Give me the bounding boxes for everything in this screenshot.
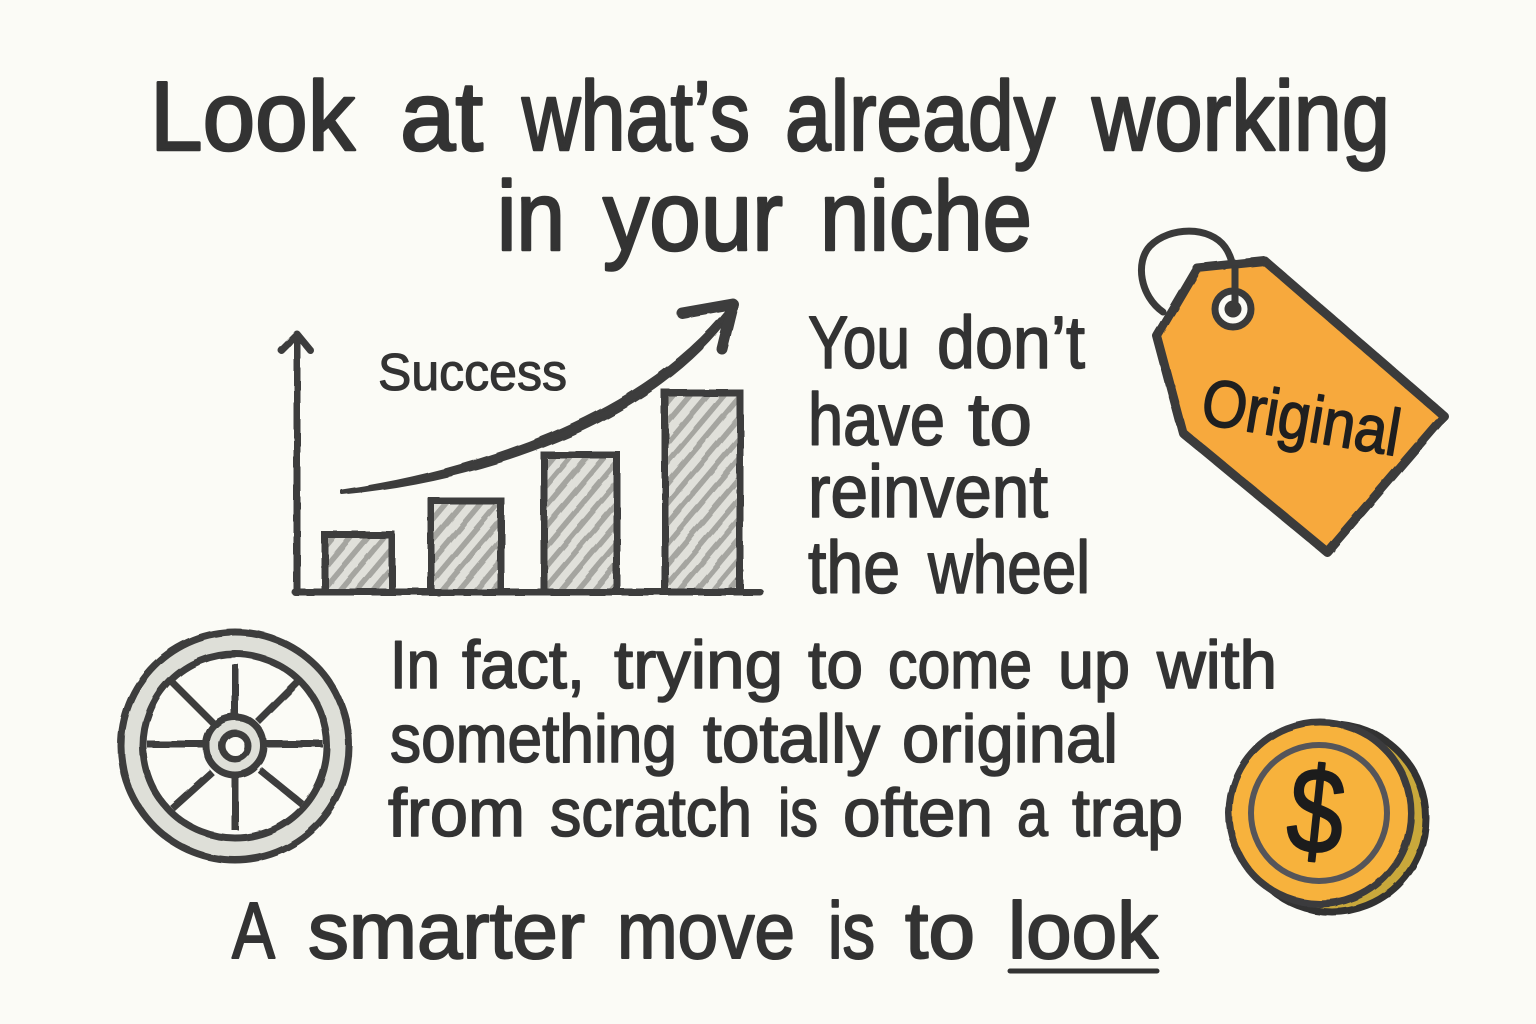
text block: in fact: from [388,775,525,851]
title: working [1091,61,1390,171]
text block: in fact: to [808,627,863,703]
text block: you don't have to reinvent the wheel: wheel [927,526,1090,609]
text block: in fact: come [888,627,1032,703]
text block: in fact: a [1017,775,1048,851]
text block: you don't have to reinvent the wheel: reinvent [808,450,1048,533]
title: what’s [521,61,750,171]
closing line: is [828,886,875,975]
bar 1 [325,535,392,592]
text block: you don't have to reinvent the wheel: to [968,378,1032,461]
title: Look [150,61,356,171]
chart axes [281,334,760,592]
coin inner ring [1251,745,1387,881]
icon: coin [1229,722,1426,912]
tag label: Original [1197,364,1406,470]
title: in [497,161,565,271]
tag string loop [1141,231,1235,312]
bar chart: success [281,304,760,592]
bar 2 [431,501,501,592]
closing line: to [905,886,975,975]
chart label: Success: Success [378,344,567,402]
text block: in fact: often [843,775,993,851]
text block: in fact: scratch [550,775,752,851]
text block: you don't have to reinvent the wheel: the [808,526,900,609]
closing line: A [232,886,276,975]
tag hole [1215,265,1251,327]
title: at [400,61,483,171]
title: your [603,161,783,271]
bar 3 [544,455,617,592]
coin face [1229,722,1411,904]
coin back edge [1238,724,1426,912]
text block: in fact: In [390,627,440,703]
text block: you don't have to reinvent the wheel [808,301,1090,609]
title: niche [820,161,1032,271]
text block: in fact: fact, [462,627,585,703]
icon: price tag [1141,231,1444,552]
wheel outlines and spokes [121,632,349,860]
title: already [785,61,1055,171]
closing line: move [617,886,795,975]
text block: in fact: trap [1072,775,1183,851]
title [150,61,1390,271]
closing line [232,886,1159,975]
text block: in fact: something [390,701,677,777]
text block: you don't have to reinvent the wheel: You [808,301,910,384]
bar 4 [665,393,740,592]
tag body [1157,261,1444,552]
wheel hub [206,717,264,775]
text block: in fact: trying [614,627,783,703]
closing line: smarter [308,886,585,975]
icon: wheel [121,632,349,860]
wheel rim [131,642,339,850]
text block: in fact: is [778,775,818,851]
text block: in fact: up [1058,627,1130,703]
emphasized word: look: look [1008,886,1159,975]
text block: in fact [388,627,1277,851]
text block: you don't have to reinvent the wheel: don’t [937,301,1085,384]
dollar sign: $ [1281,740,1351,881]
text block: in fact: totally [703,701,880,777]
text block: in fact: original [902,701,1118,777]
growth arrow [342,304,733,493]
text block: you don't have to reinvent the wheel: have [808,378,945,461]
text block: in fact: with [1156,627,1277,703]
